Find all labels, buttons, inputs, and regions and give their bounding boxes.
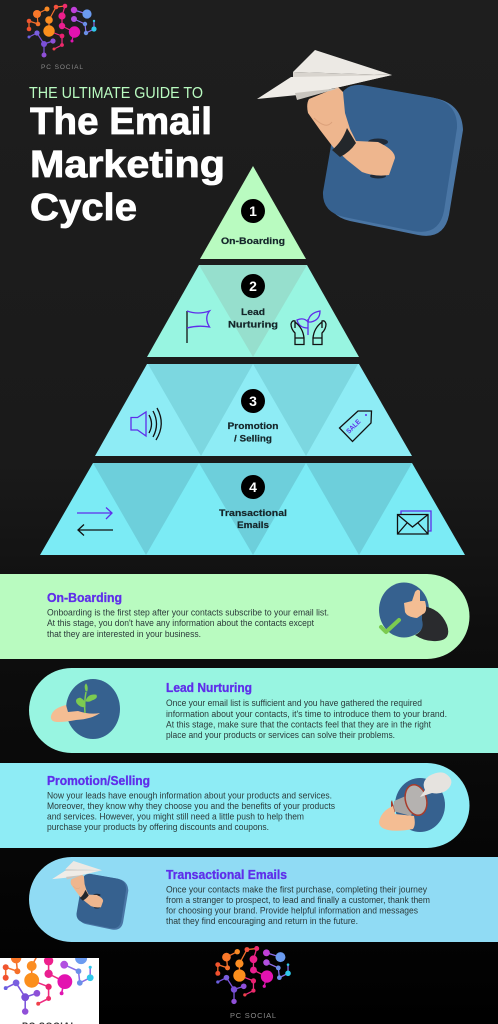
label: Promotion / Selling [228, 421, 278, 444]
number 2 [241, 274, 265, 298]
body text [47, 608, 329, 640]
body text: purchase your products by offering discounts and coupons. [47, 822, 269, 833]
body text: and services. However, you might still need a little push to help them [47, 812, 304, 822]
pyramid tier 4: Transactional Emails [40, 463, 465, 555]
icon: sale tag [340, 411, 372, 442]
icon: hands with plant [291, 311, 326, 344]
title: Marketing [30, 144, 225, 186]
icon: megaphone and speech bubble [379, 772, 451, 832]
number 3 [241, 389, 265, 413]
label: Transactional Emails: Transactional [219, 508, 287, 518]
body text: At this stage, make sure that the contacts feel that they are in the right [166, 720, 431, 730]
label: Promotion / Selling: Promotion [228, 421, 278, 431]
icon: speaker [131, 408, 161, 440]
label: On-Boarding: On-Boarding [221, 236, 285, 246]
body text [47, 790, 335, 833]
top logo [27, 4, 97, 71]
panel: Transactional Emails [29, 857, 498, 942]
label: Transactional Emails [219, 508, 287, 530]
title [30, 101, 225, 229]
body text: Once your contacts make the first purchase, completing their journey [166, 884, 427, 896]
label: Lead Nurturing [228, 307, 278, 330]
heading: Lead Nurturing [166, 681, 252, 695]
body text [166, 884, 430, 927]
label: Promotion / Selling: / Selling [234, 434, 272, 444]
pyramid tier 3: Promotion / Selling [95, 364, 412, 456]
pyramid tier 2: Lead Nurturing [147, 265, 359, 357]
heading: Transactional Emails [166, 868, 287, 882]
body text: from a stranger to prospect, to lead and finally a customer, thank them [166, 895, 430, 906]
body text: At this stage, you don't have any information about the contacts except [47, 618, 314, 629]
top logo: PC SOCIAL [41, 64, 83, 71]
icon: flag [187, 311, 210, 343]
number 1: 1 [249, 203, 257, 219]
body text: for choosing your brand. Provide helpful information and messages [166, 906, 418, 916]
body text: Onboarding is the first step after your contacts subscribe to your email list. [47, 608, 329, 618]
body text [166, 698, 447, 741]
label: Transactional Emails: Emails [237, 520, 269, 530]
white logo box [0, 945, 99, 1024]
body text: that they are interested in your business. [47, 629, 201, 640]
number 2: 2 [249, 278, 257, 294]
number 4: 4 [249, 479, 257, 495]
bottom centre logo [215, 946, 291, 1020]
subtitle: THE ULTIMATE GUIDE TO [29, 85, 203, 102]
heading: On-Boarding [47, 591, 122, 605]
number 4 [241, 475, 265, 499]
body text: Now your leads have enough information about your products and services. [47, 790, 332, 802]
body text: Moreover, they know why they choose you and the benefits of your products [47, 801, 335, 812]
panel: Promotion/Selling [0, 763, 470, 848]
label: Lead Nurturing: Nurturing [228, 320, 278, 330]
label: Lead Nurturing: Lead [241, 307, 265, 317]
title: Cycle [30, 187, 137, 229]
pyramid tier 1: On-Boarding [200, 166, 306, 259]
icon: sale tag: SALE [345, 418, 363, 435]
panel: Lead Nurturing [29, 668, 498, 753]
illustration: paper plane and blue card [257, 50, 463, 236]
icon: exchange arrows [77, 508, 113, 536]
heading: Promotion/Selling [47, 774, 150, 788]
bottom centre logo: PC SOCIAL [230, 1011, 276, 1020]
icon: hand holding sprout on blue coin [51, 679, 120, 739]
body text: information about your contacts, it's time to introduce them to your brand. [166, 709, 447, 720]
body text: that they find encouraging and return in the future. [166, 916, 358, 927]
icon: paper plane and blue card small [52, 861, 128, 930]
body text: Once your email list is sufficient and you have gathered the required [166, 698, 422, 709]
number 3: 3 [249, 393, 257, 409]
body text: place and your products or services can solve their problems. [166, 730, 395, 741]
panel: On-Boarding [0, 574, 470, 659]
icon: thumbs up on blue coin [379, 582, 448, 641]
icon: envelope [398, 511, 431, 534]
title: The Email [30, 101, 212, 143]
